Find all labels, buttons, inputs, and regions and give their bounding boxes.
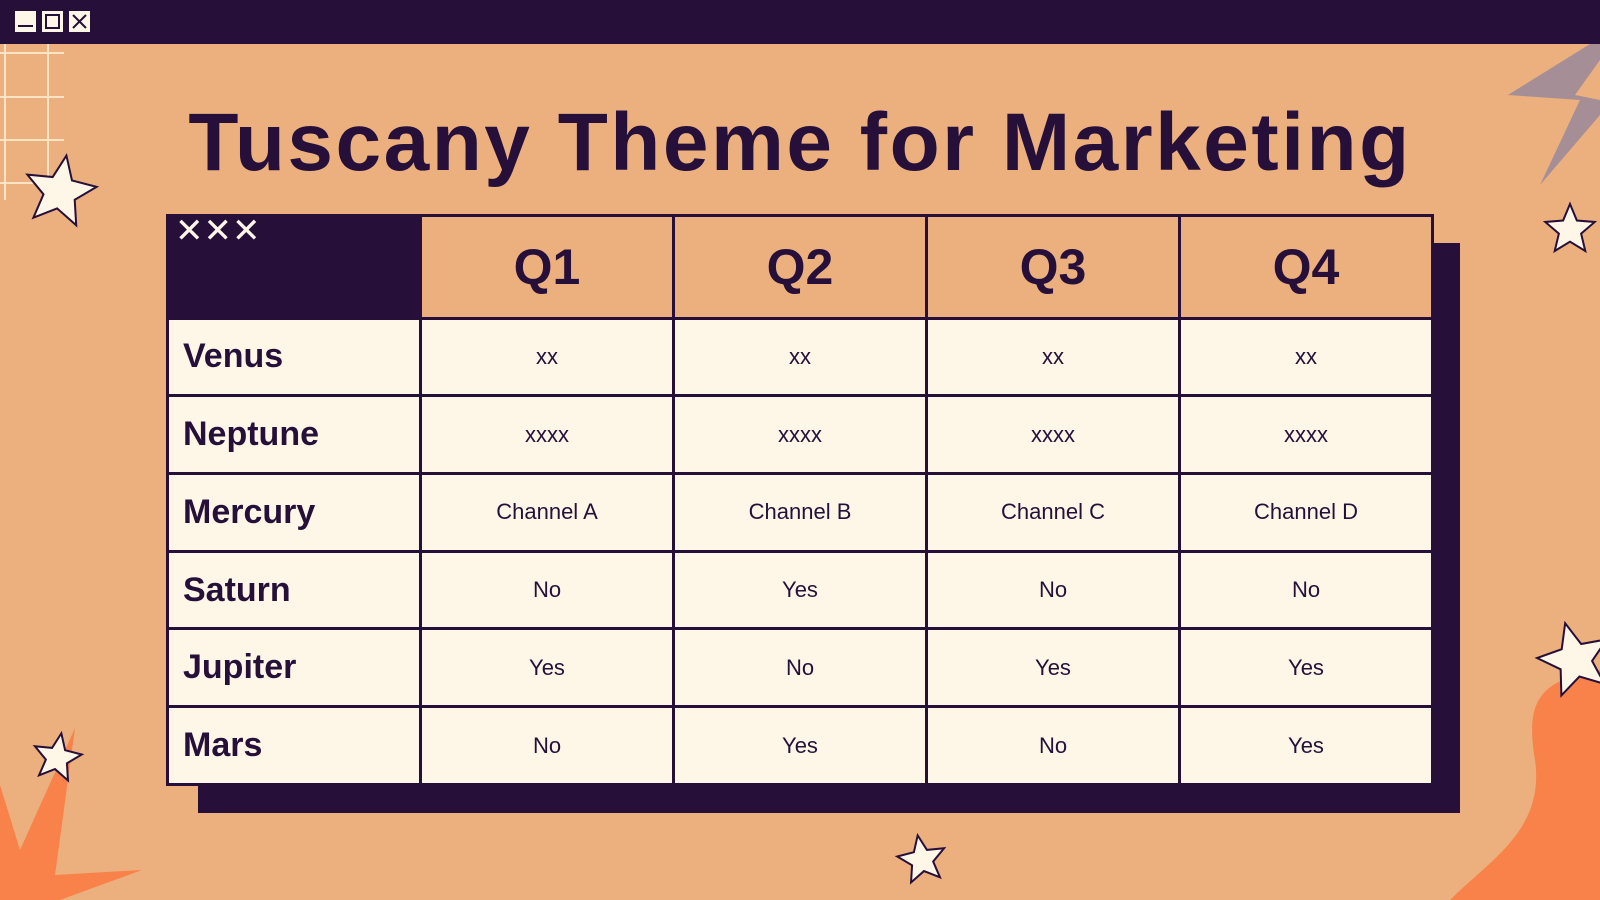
table: Saturn: [183, 571, 291, 609]
top window bar: [0, 0, 1600, 44]
table: No: [533, 733, 561, 758]
table: Yes: [1288, 733, 1324, 758]
table: [166, 212, 1434, 786]
table: Q2: [767, 239, 833, 295]
table: Channel C: [1001, 499, 1105, 524]
table: No: [533, 577, 561, 602]
table: Channel B: [749, 499, 851, 524]
table shadow: [198, 243, 1460, 813]
table: xxxx: [1284, 422, 1328, 447]
table: Q4: [1273, 239, 1339, 295]
table: xxxx: [778, 422, 822, 447]
table: Neptune: [183, 415, 319, 453]
table: Yes: [1288, 655, 1324, 680]
table: Channel A: [496, 499, 598, 524]
table: xx: [789, 344, 811, 369]
table: xxxx: [525, 422, 569, 447]
table: xx: [536, 344, 558, 369]
table: Yes: [529, 655, 565, 680]
table: Yes: [782, 577, 818, 602]
table: Yes: [782, 733, 818, 758]
table: No: [1292, 577, 1320, 602]
table: xx: [1295, 344, 1317, 369]
table: Jupiter: [183, 648, 296, 686]
table: No: [786, 655, 814, 680]
table: No: [1039, 577, 1067, 602]
icon: window buttons: [15, 11, 90, 32]
table: Venus: [183, 337, 283, 375]
table: xx: [1042, 344, 1064, 369]
table: Channel D: [1254, 499, 1358, 524]
table: Yes: [1035, 655, 1071, 680]
table: xxxx: [1031, 422, 1075, 447]
table: ✕✕✕: [175, 212, 260, 250]
table: Q3: [1020, 239, 1086, 295]
title: Tuscany Theme for Marketing: [188, 97, 1412, 188]
table: Mars: [183, 726, 262, 764]
table: Mercury: [183, 493, 315, 531]
table: No: [1039, 733, 1067, 758]
table: Q1: [514, 239, 580, 295]
